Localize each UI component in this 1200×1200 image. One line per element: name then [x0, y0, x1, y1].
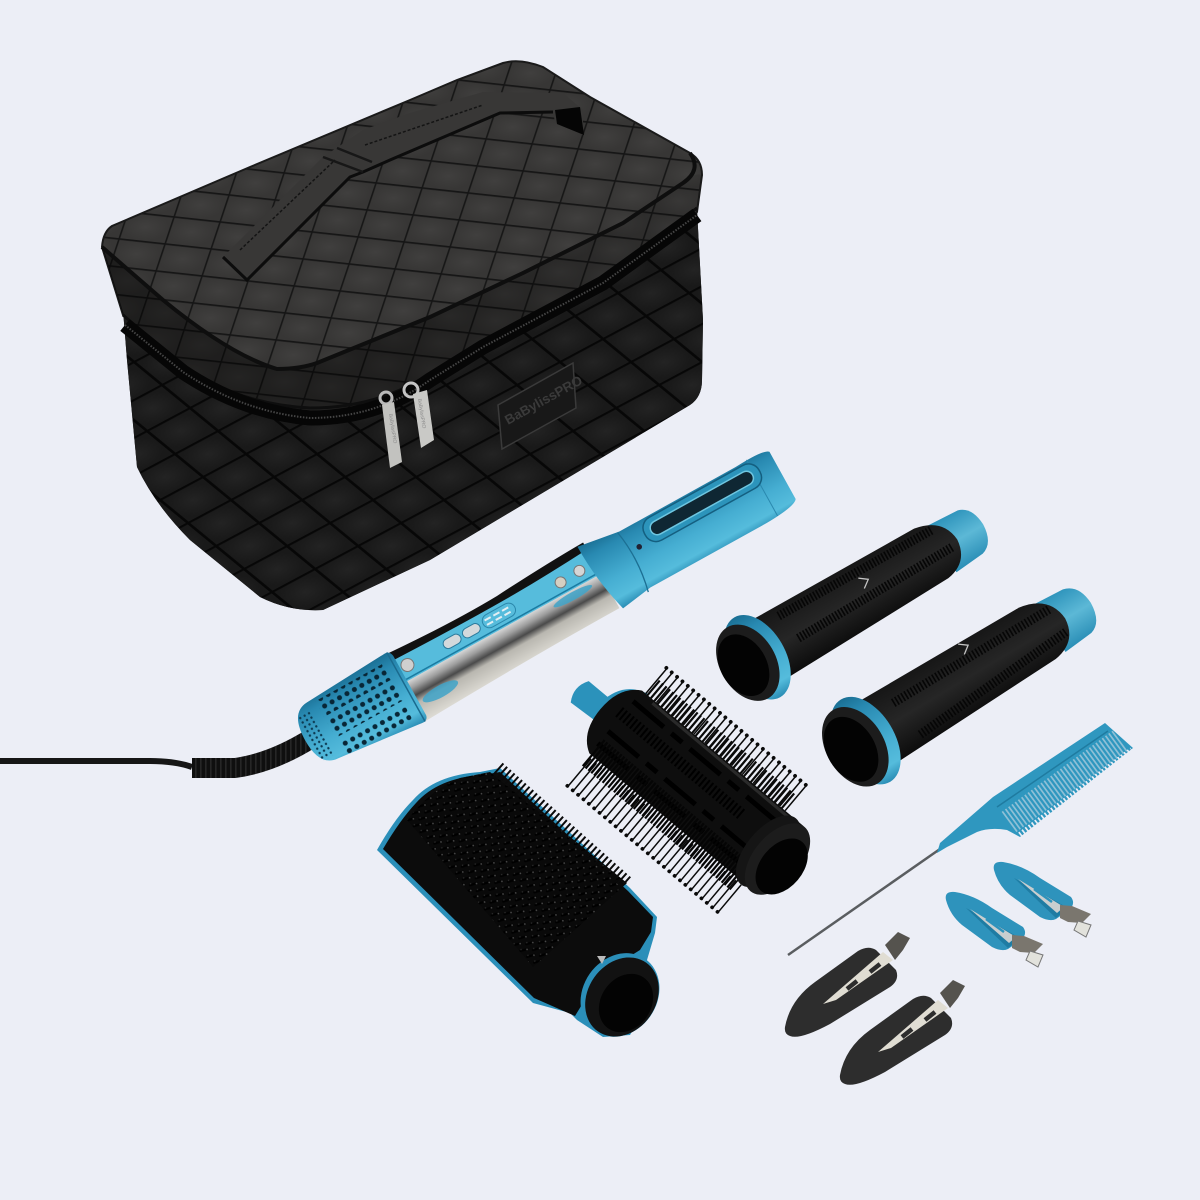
bag body — [123, 210, 703, 610]
roller opening — [707, 625, 780, 705]
neck marker — [597, 956, 606, 964]
barrel vents — [598, 701, 779, 866]
upper bristles — [651, 668, 809, 806]
zipper pulls: BaBylissPRO — [387, 413, 398, 444]
clip slot — [1014, 878, 1068, 918]
roller barrel — [753, 511, 975, 678]
brand label patch — [498, 363, 585, 449]
blue knob — [567, 678, 616, 725]
lid piping — [102, 153, 695, 369]
paddle blue edge — [377, 768, 657, 1037]
clip body — [840, 996, 952, 1085]
roller chevron mark — [958, 640, 971, 654]
panel: quilted travel bag — [102, 61, 703, 610]
brush opening — [745, 828, 818, 904]
paddle opening — [588, 963, 664, 1043]
roller chevron mark — [858, 574, 871, 589]
clip body — [946, 892, 1025, 950]
roller texture — [893, 608, 1073, 738]
roller end cap — [925, 501, 997, 575]
clip body — [785, 948, 897, 1037]
clip metal — [878, 1000, 948, 1052]
roller opening — [812, 707, 890, 792]
blue clip right — [994, 862, 1091, 937]
blue collar — [816, 685, 915, 797]
clip metal — [1018, 879, 1064, 913]
comb body — [937, 723, 1133, 853]
air slot — [639, 460, 766, 546]
blue collar — [710, 603, 805, 711]
middle bristles — [619, 712, 742, 815]
roller barrel — [859, 588, 1084, 763]
power cord — [0, 738, 312, 768]
waist with chrome — [382, 542, 622, 724]
chrome reflections — [420, 676, 461, 706]
comb teeth — [1009, 740, 1121, 822]
brush barrel — [574, 678, 804, 889]
control buttons — [399, 562, 588, 675]
zipper — [125, 215, 697, 418]
lid side band — [102, 174, 702, 412]
paddle edge bristles — [498, 768, 628, 884]
clip metal — [970, 909, 1016, 943]
cord strain relief — [192, 738, 312, 768]
main styler handle — [287, 442, 803, 777]
paddle body — [383, 772, 653, 1016]
black display strip — [382, 542, 589, 665]
roller rim — [808, 695, 902, 799]
paddle brush attachment — [377, 768, 676, 1052]
black clip upper — [785, 932, 910, 1037]
clip metal — [823, 952, 893, 1004]
roller end cap — [1034, 579, 1106, 653]
blue control panel — [392, 549, 601, 682]
zipper pulls — [380, 383, 434, 468]
bag handle — [223, 92, 584, 280]
paddle bristles — [407, 772, 627, 967]
clip body — [994, 862, 1073, 920]
roller attachment 1 — [701, 486, 1007, 717]
paddle rim — [570, 943, 674, 1051]
blue end rim — [601, 674, 653, 726]
comb metal pin — [788, 849, 940, 955]
paddle blue ring — [564, 938, 676, 1052]
roller rim — [703, 613, 793, 712]
blue upper barrel — [577, 443, 801, 613]
roller texture — [779, 523, 954, 641]
blue clip left — [946, 892, 1043, 967]
bag lid — [102, 61, 702, 412]
brand label patch: BaBylissPRO — [502, 373, 585, 428]
zipper pulls: BaBylissPRO — [416, 398, 427, 429]
tail comb — [788, 723, 1133, 955]
lower bristles — [566, 752, 748, 914]
brush rim — [724, 804, 813, 898]
round brush attachment — [525, 632, 848, 938]
roller attachment 2 — [806, 563, 1117, 803]
perforated base — [287, 650, 429, 777]
clip slot — [966, 908, 1020, 948]
black clip lower — [840, 980, 965, 1085]
